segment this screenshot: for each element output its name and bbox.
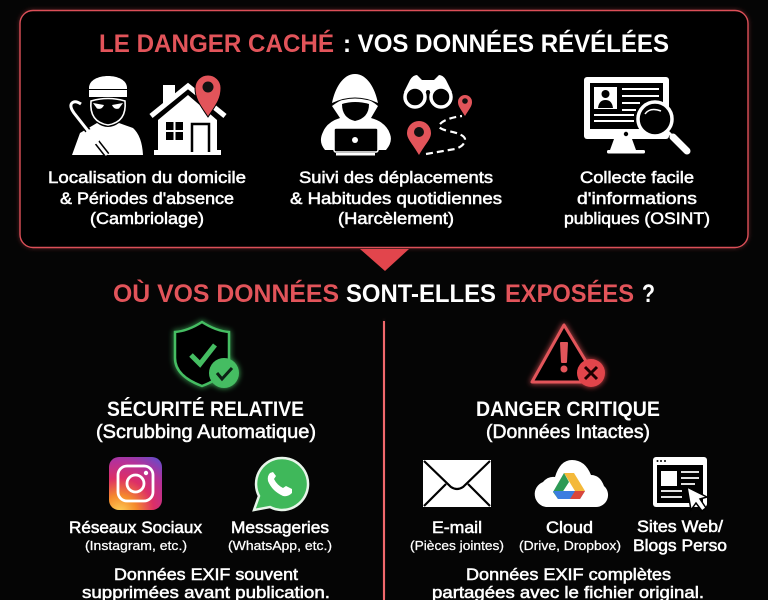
icon: browser with cursor [653,457,707,511]
title: LE DANGER CACHÉ [99,29,334,58]
label: sites web: Sites Web/ [637,517,723,536]
panel: sécurité relative [69,322,332,600]
heading: danger: DANGER CRITIQUE [476,398,660,421]
text: OSINT: publiques (OSINT) [564,209,710,228]
heading: où vos données: OÙ VOS DONNÉES [113,278,339,308]
text: exif supprimées [82,565,330,600]
heading: danger: (Données Intactes) [486,422,650,443]
heading: danger [476,398,660,443]
panel: le danger caché [20,10,748,248]
text: OSINT: d'informations [577,189,697,208]
text: déplacements: & Habitudes quotidiennes [290,189,502,208]
text: domicile: (Cambriolage) [90,209,204,228]
label: messageries: Messageries [231,518,329,537]
label: réseaux sociaux: Réseaux Sociaux [69,518,202,537]
label: sites web [633,517,727,555]
icon: binoculars and route [404,75,472,155]
icon: envelope [423,460,491,507]
heading: où vos données [113,278,655,308]
heading: sécurité: (Scrubbing Automatique) [96,422,316,443]
text: OSINT [564,168,710,228]
text: déplacements: (Harcèlement) [338,209,454,228]
heading: où vos données: EXPOSÉES [505,279,634,308]
icon: monitor with magnifier [584,77,687,154]
arrow: down triangle [360,249,409,271]
icon: house with location pin [151,75,225,155]
icon: Instagram [109,457,162,510]
text: OSINT: Collecte facile [580,168,694,187]
icon: hooded hacker [321,74,391,156]
label: e-mail: (Pièces jointes) [410,538,504,553]
text: exif complètes [432,565,704,600]
label: réseaux sociaux [69,518,202,553]
text: déplacements: Suivi des déplacements [299,168,493,187]
label: e-mail [410,518,504,553]
label: e-mail: E-mail [432,518,482,537]
text: domicile [48,168,246,228]
label: messageries: (WhatsApp, etc.) [228,538,332,553]
text: domicile: & Périodes d'absence [60,189,234,208]
heading: sécurité: SÉCURITÉ RELATIVE [107,398,304,421]
text: exif complètes: Données EXIF complètes [466,565,671,584]
text: domicile: Localisation du domicile [48,168,246,187]
text: exif supprimées: Données EXIF souvent [114,565,298,584]
icon: red warning [532,325,605,387]
heading: où vos données: SONT-ELLES [346,280,496,308]
icon: WhatsApp [254,458,308,510]
panel: danger critique [410,325,727,600]
heading: où vos données: ? [642,280,655,308]
label: messageries [228,518,332,553]
label: réseaux sociaux: (Instagram, etc.) [85,538,187,553]
icon: green shield [175,322,239,388]
title [99,29,669,58]
heading: sécurité [96,398,316,443]
divider [383,321,385,600]
label: sites web: Blogs Perso [633,536,727,555]
icon: cloud with Drive [535,460,608,507]
label: cloud: (Drive, Dropbox) [519,538,621,553]
label: cloud: Cloud [546,518,593,537]
text: déplacements [290,168,502,228]
icon: burglar [71,76,143,155]
label: cloud [519,518,621,553]
title: : VOS DONNÉES RÉVÉLÉES [343,29,669,58]
